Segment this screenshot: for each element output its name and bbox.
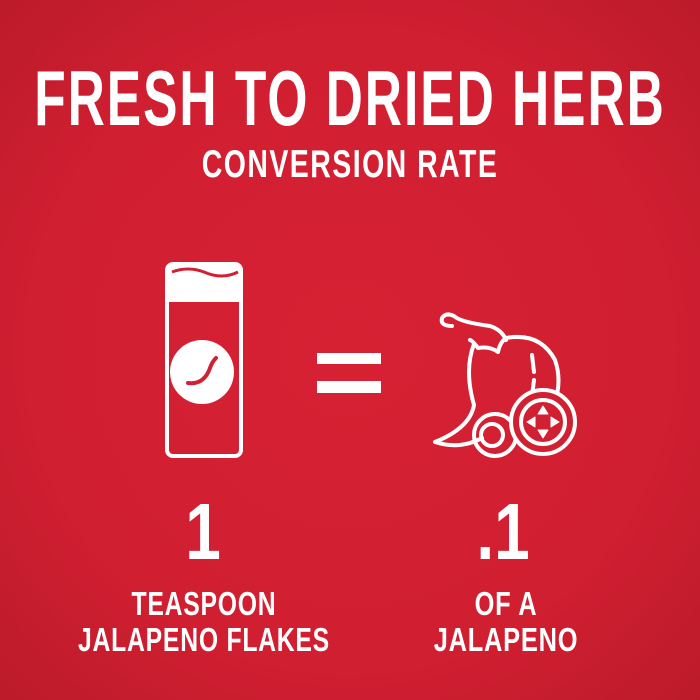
label right bbox=[434, 585, 578, 658]
label left: JALAPENO FLAKES bbox=[78, 621, 330, 658]
number right: .1 bbox=[476, 487, 530, 576]
label left: TEASPOON bbox=[132, 585, 276, 622]
subtitle: CONVERSION RATE bbox=[202, 143, 498, 186]
title: FRESH TO DRIED HERB bbox=[34, 54, 666, 142]
label left bbox=[78, 585, 330, 658]
label right: JALAPENO bbox=[434, 621, 578, 658]
icon: spice bottle bbox=[165, 262, 243, 458]
icon: equals bbox=[317, 353, 381, 393]
label right: OF A bbox=[475, 585, 537, 622]
number left: 1 bbox=[185, 487, 221, 576]
icon: jalapeno bbox=[432, 312, 577, 458]
